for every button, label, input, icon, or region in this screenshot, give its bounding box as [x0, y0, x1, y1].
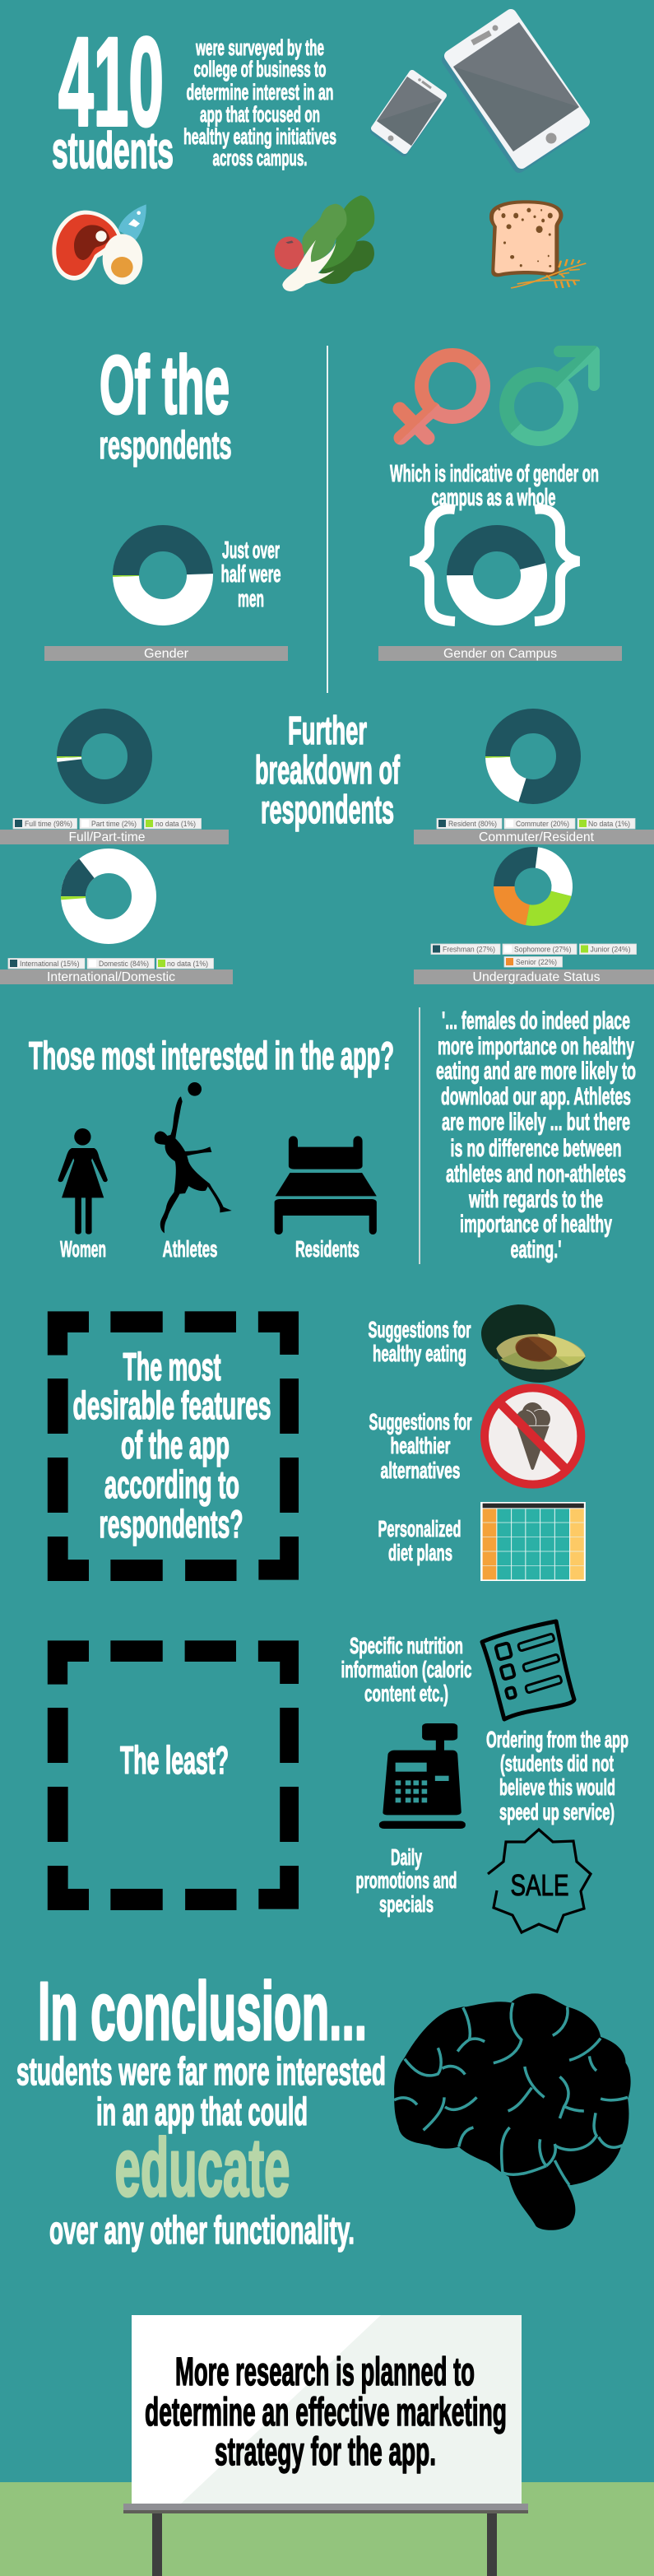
- intro text block: college of business to: [194, 57, 326, 81]
- icon: sale badge: [488, 1830, 591, 1932]
- legend: international/domestic: [8, 958, 214, 969]
- intro text block: healthy eating initiatives: [183, 124, 336, 149]
- text: personalized diet plans: diet plans: [388, 1540, 452, 1565]
- heading: the least: The least?: [120, 1738, 229, 1782]
- text: suggestions for healthy eating: [369, 1317, 471, 1366]
- icon: cash register: [379, 1723, 466, 1829]
- text: specific nutrition information: information (caloric: [341, 1657, 472, 1682]
- heading: most desirable features: respondents?: [99, 1502, 244, 1546]
- heading: in conclusion: In conclusion...: [38, 1965, 367, 2058]
- icon: bread and wheat: [489, 200, 586, 288]
- legend: full/part-time: [13, 818, 201, 829]
- label bar: gender on campus: Gender on Campus: [443, 647, 557, 661]
- legend: undergraduate status: Junior (24%): [591, 945, 630, 955]
- label bar: commuter/resident: Commuter/Resident: [479, 830, 595, 844]
- text: daily promotions and specials: specials: [379, 1891, 434, 1917]
- icon: male symbol: [507, 351, 594, 439]
- label bar: commuter/resident: [414, 830, 654, 844]
- heading: further breakdown of respondents: Further: [288, 709, 367, 753]
- icon: small phone: [373, 73, 443, 153]
- legend: undergraduate status: Senior (22%): [516, 958, 557, 967]
- intro text block: across campus.: [212, 146, 308, 170]
- icon: sale badge: SALE: [510, 1868, 569, 1902]
- icon: brain: [394, 1993, 631, 2230]
- intro text block: were surveyed by the: [195, 35, 324, 60]
- text: just over half were men: men: [238, 586, 264, 612]
- donut chart: international/domestic: [71, 858, 146, 934]
- text: specific nutrition information: content etc.): [364, 1681, 448, 1706]
- quote text block: eating.': [510, 1236, 561, 1263]
- text: daily promotions and specials: promotions and: [355, 1867, 457, 1893]
- text: suggestions for healthy eating: Suggestions for: [369, 1317, 471, 1342]
- conclusion text block: [16, 2049, 386, 2252]
- text: suggestions for healthier alternatives: Suggestions for: [369, 1409, 472, 1434]
- label bar: undergraduate status: [414, 969, 654, 984]
- intro text block: app that focused on: [200, 102, 320, 127]
- vertical divider: [327, 346, 328, 693]
- heading: most desirable features: The most: [123, 1345, 221, 1388]
- legend: commuter/resident: Commuter (20%): [516, 820, 569, 829]
- label bar: international/domestic: [0, 969, 233, 984]
- legend: commuter/resident: [437, 818, 635, 829]
- billboard: [123, 2315, 528, 2576]
- legend: full/part-time: Part time (2%): [91, 820, 137, 829]
- donut chart: gender on campus: [452, 530, 542, 621]
- text: just over half were men: half were: [220, 561, 281, 588]
- legend: undergraduate status: [431, 944, 637, 967]
- heading: most desirable features: according to: [104, 1462, 239, 1506]
- billboard text: strategy for the app.: [215, 2430, 436, 2474]
- intro text block: [183, 35, 336, 170]
- donut chart: full/part-time: [65, 717, 144, 796]
- heading: 410 students: [52, 12, 174, 179]
- text: indicative of gender on campus: [390, 461, 599, 511]
- donut chart: commuter/resident: [489, 712, 577, 801]
- text: suggestions for healthier alternatives: [369, 1409, 472, 1483]
- label bar: full/part-time: Full/Part-time: [69, 830, 146, 844]
- legend: international/domestic: no data (1%): [167, 960, 208, 969]
- text: ordering from the app: [486, 1727, 628, 1825]
- icon labels: women, athletes, residents: [60, 1236, 359, 1262]
- donut chart: gender: [125, 537, 201, 613]
- heading: 410 students: 410: [58, 12, 164, 152]
- icon: woman: [58, 1128, 108, 1235]
- label bar: undergraduate status: Undergraduate Status: [472, 970, 601, 984]
- dashed frame: most desirable: [48, 1311, 299, 1581]
- heading: most desirable features: desirable features: [72, 1383, 271, 1427]
- text: indicative of gender on campus: campus as a whole: [431, 485, 556, 511]
- heading: Of the respondents: Of the: [100, 339, 230, 431]
- icon: menu list: [482, 1621, 574, 1719]
- donut chart: undergraduate status: [498, 851, 568, 922]
- text: daily promotions and specials: [355, 1844, 457, 1917]
- heading: 410 students: students: [52, 123, 174, 179]
- label bar: gender: Gender: [144, 647, 189, 661]
- icon labels: women, athletes, residents: Women: [60, 1236, 106, 1262]
- legend: undergraduate status: Sophomore (27%): [514, 945, 571, 955]
- text: just over half were men: Just over: [222, 537, 280, 564]
- icon: female symbol: [400, 356, 484, 438]
- text: daily promotions and specials: Daily: [391, 1844, 422, 1870]
- label bar: gender: [44, 646, 288, 661]
- icon labels: women, athletes, residents: Athletes: [163, 1236, 217, 1262]
- icon labels: women, athletes, residents: Residents: [295, 1236, 359, 1262]
- legend: commuter/resident: No data (1%): [588, 820, 630, 829]
- icon: curly braces: [410, 509, 579, 621]
- dashed frame: the least: [48, 1640, 299, 1910]
- legend: full/part-time: Full time (98%): [25, 820, 72, 829]
- quote text block: [436, 1007, 636, 1263]
- legend: undergraduate status: Freshman (27%): [443, 945, 495, 955]
- heading: further breakdown of respondents: breakdown of: [255, 749, 401, 793]
- heading: Of the respondents: [99, 339, 232, 467]
- vertical divider: [419, 1007, 420, 1264]
- label bar: full/part-time: [0, 830, 229, 844]
- icon: meat, fish and egg: [52, 204, 146, 285]
- conclusion text block: students were far more interested: [16, 2049, 386, 2093]
- heading: Of the respondents: respondents: [99, 423, 232, 467]
- text: specific nutrition information: [341, 1633, 472, 1706]
- legend: commuter/resident: Resident (80%): [448, 820, 497, 829]
- icon: calendar diet plan: [480, 1502, 586, 1581]
- text: personalized diet plans: [378, 1516, 461, 1565]
- icon: athlete with ball: [155, 1082, 232, 1233]
- icon: no ice cream sign: [480, 1383, 585, 1489]
- intro text block: determine interest in an: [186, 80, 334, 105]
- legend: full/part-time: no data (1%): [155, 820, 196, 829]
- text: suggestions for healthier alternatives: alternatives: [380, 1458, 461, 1483]
- legend: international/domestic: International (15%): [20, 960, 79, 969]
- text: specific nutrition information: Specific nutrition: [350, 1633, 463, 1658]
- heading: further breakdown of respondents: [255, 709, 401, 832]
- text: suggestions for healthy eating: healthy eating: [373, 1341, 466, 1366]
- heading: most desirable features: of the app: [121, 1423, 230, 1467]
- ground: [0, 2482, 654, 2576]
- icon: bed: [275, 1136, 377, 1235]
- heading: those most interested: Those most interested in the app?: [29, 1034, 394, 1077]
- conclusion text block: over any other functionality.: [49, 2208, 355, 2252]
- text: personalized diet plans: Personalized: [378, 1516, 461, 1541]
- conclusion text block: educate: [115, 2122, 290, 2214]
- icon: large phone: [448, 15, 584, 167]
- label bar: international/domestic: International/Domestic: [47, 970, 175, 984]
- heading: further breakdown of respondents: respondents: [261, 788, 394, 832]
- label bar: gender on campus: [378, 646, 622, 661]
- icon: avocado: [481, 1304, 586, 1383]
- conclusion text block: in an app that could: [96, 2090, 308, 2133]
- text: just over half were men: [220, 537, 281, 612]
- billboard text: [145, 2350, 507, 2474]
- legend: international/domestic: Domestic (84%): [99, 960, 149, 969]
- text: suggestions for healthier alternatives: healthier: [390, 1433, 451, 1458]
- icon: leafy greens and tomato: [275, 195, 374, 291]
- heading: most desirable features: [72, 1345, 271, 1546]
